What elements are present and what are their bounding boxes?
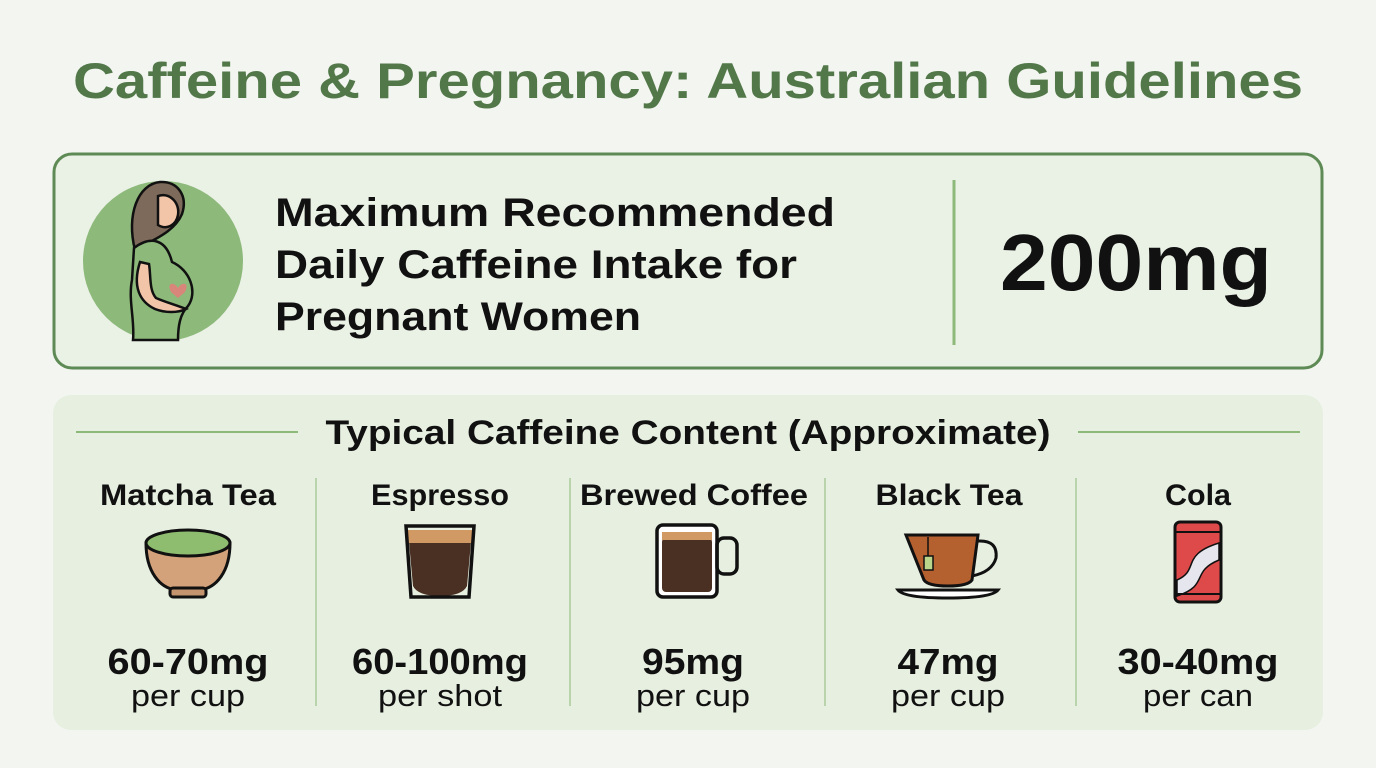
column: matcha tea: 60-70mg (108, 641, 268, 682)
column: espresso: Espresso (371, 479, 509, 512)
column: black tea (876, 479, 1023, 713)
column: matcha tea (100, 479, 276, 713)
column: cola: 30-40mg (1118, 641, 1278, 682)
column: cola: Cola (1165, 479, 1231, 512)
column: matcha tea: Matcha Tea (100, 479, 276, 512)
value: 200mg: 200mg (1000, 218, 1272, 307)
icon: espresso glass (406, 526, 474, 597)
icon: coffee mug (657, 525, 737, 597)
column: espresso (352, 479, 528, 713)
column: brewed coffee: per cup (636, 678, 750, 713)
column: cola: per can (1143, 678, 1253, 713)
column: espresso: 60-100mg (352, 641, 528, 682)
column: matcha tea: per cup (131, 678, 245, 713)
panel: maximum intake (54, 154, 1322, 368)
column: black tea: Black Tea (876, 479, 1023, 512)
column: espresso: per shot (378, 678, 502, 713)
heading text: Daily Caffeine Intake for (275, 243, 797, 287)
icon: matcha bowl (146, 530, 230, 597)
icon: tea cup (898, 535, 998, 598)
heading text: Maximum Recommended (275, 191, 835, 235)
heading text (275, 191, 835, 339)
title: Caffeine & Pregnancy: Australian Guidelines (73, 53, 1303, 109)
section heading: Typical Caffeine Content (Approximate) (326, 414, 1050, 452)
icon: pregnant woman (83, 181, 243, 341)
column: black tea: 47mg (898, 641, 998, 682)
icon: cola can (1175, 522, 1221, 602)
panel: typical caffeine content (53, 395, 1323, 730)
heading text: Pregnant Women (275, 295, 641, 339)
column: cola (1118, 479, 1278, 713)
column: brewed coffee: 95mg (642, 641, 744, 682)
column: black tea: per cup (891, 678, 1005, 713)
column: brewed coffee: Brewed Coffee (580, 479, 808, 512)
column: brewed coffee (580, 479, 808, 713)
